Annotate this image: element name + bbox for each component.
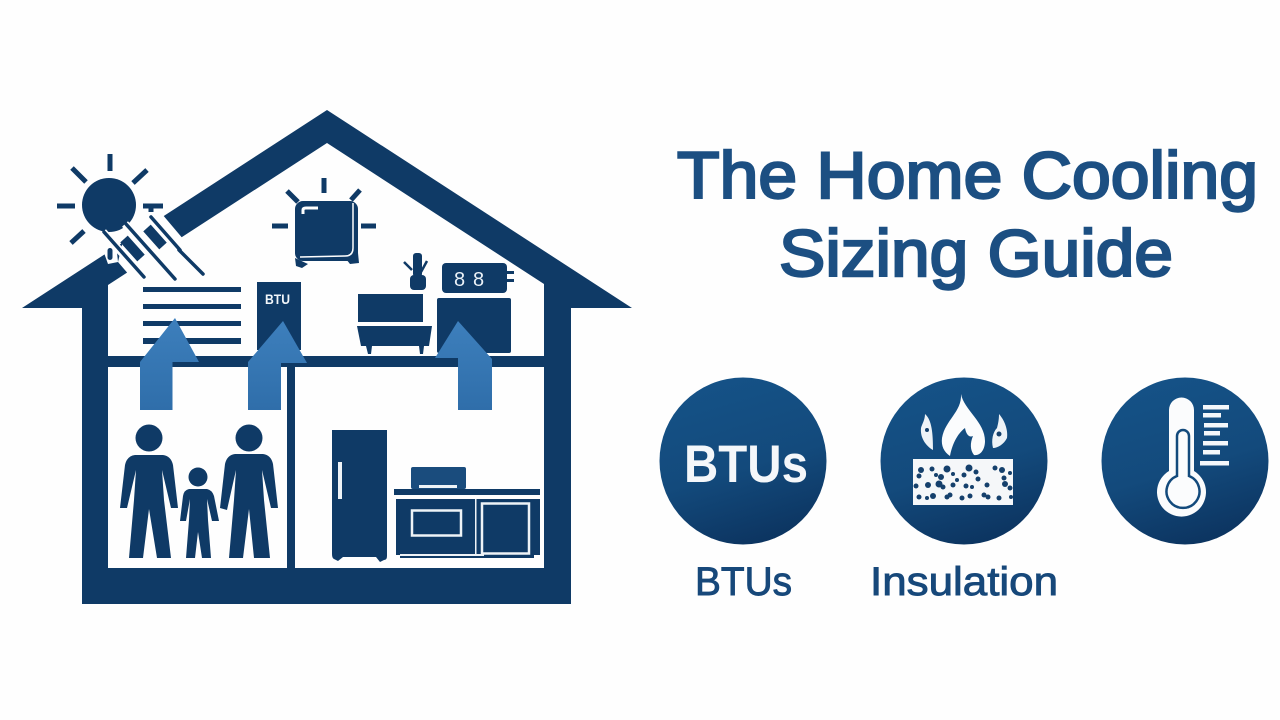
icon: window blinds: [143, 287, 241, 344]
thermostat panel: [257, 282, 301, 350]
icon: right flame: [992, 414, 1007, 448]
family of occupants: [120, 424, 278, 558]
furniture: tub and cabinet: [357, 294, 432, 354]
refrigerator: [332, 430, 387, 562]
kitchen stove and counter: [394, 467, 540, 558]
badge: BTUs: [660, 378, 826, 544]
house illustration: [22, 110, 632, 604]
badge: temperature: [1102, 378, 1268, 544]
thermostat label: BTU: [265, 291, 290, 307]
badge: insulation: [880, 378, 1048, 544]
child figure: [180, 468, 219, 558]
electronics on console: [437, 263, 514, 353]
icon: thermometer: [1157, 398, 1206, 517]
heat arrow 1: [140, 318, 199, 410]
house outline walls and roof: [22, 110, 632, 604]
label: BTUs: BTUs: [695, 560, 792, 604]
badge text: BTUs: [684, 435, 808, 494]
icon: insulation block: [913, 459, 1013, 505]
heat arrow 3: [435, 321, 492, 410]
upper floor slab: [108, 356, 544, 367]
title: [677, 138, 1258, 290]
heat arrow 2: [248, 321, 307, 410]
icon: temperature scale ticks: [1200, 405, 1229, 466]
adult figure right: [220, 424, 278, 558]
plant: [404, 253, 427, 290]
icon: left flame: [921, 414, 933, 450]
electronics on console: 8: [454, 269, 465, 291]
icon: heat-emitting appliance: [272, 178, 376, 268]
icon: center flame: [942, 394, 985, 456]
electronics on console: 8: [473, 269, 484, 291]
adult figure left: [120, 424, 178, 558]
interior dividing wall: [287, 362, 295, 568]
icon: sun with heat rays: [57, 154, 203, 280]
label: insulation: Insulation: [870, 560, 1058, 604]
title line 1: The Home Cooling: [677, 138, 1258, 212]
title line 2: Sizing Guide: [779, 216, 1173, 290]
